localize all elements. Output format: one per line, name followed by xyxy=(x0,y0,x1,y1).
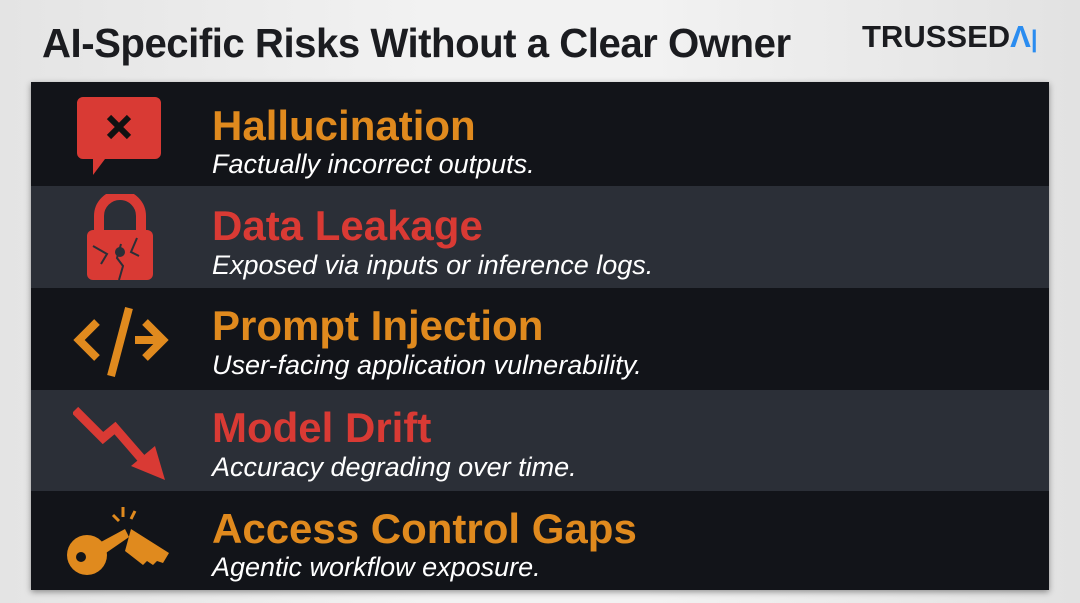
icon: broken lock xyxy=(87,194,153,280)
row: prompt injection xyxy=(31,288,1049,390)
heading: Prompt Injection xyxy=(212,302,543,349)
row: data leakage xyxy=(31,186,1049,288)
row: hallucination xyxy=(31,82,1049,186)
description: User-facing application vulnerability. xyxy=(212,350,642,380)
description: Factually incorrect outputs. xyxy=(212,149,535,179)
title: AI-Specific Risks Without a Clear Owner xyxy=(42,20,791,66)
icon: broken key xyxy=(67,507,169,575)
panel: risk list xyxy=(31,82,1049,590)
row: access control gaps xyxy=(31,491,1049,590)
description: Agentic workflow exposure. xyxy=(212,552,541,582)
row: model drift xyxy=(31,390,1049,491)
icon: downward arrow xyxy=(73,406,165,480)
description: Exposed via inputs or inference logs. xyxy=(212,250,653,280)
heading: Access Control Gaps xyxy=(212,505,637,552)
heading: Model Drift xyxy=(212,404,431,451)
icon: code brackets xyxy=(73,307,169,377)
icon: speech bubble with x xyxy=(77,97,161,175)
description: Accuracy degrading over time. xyxy=(212,452,577,482)
heading: Data Leakage xyxy=(212,202,483,249)
logo: TRUSSEDΛ| xyxy=(862,19,1038,54)
heading: Hallucination xyxy=(212,102,476,149)
